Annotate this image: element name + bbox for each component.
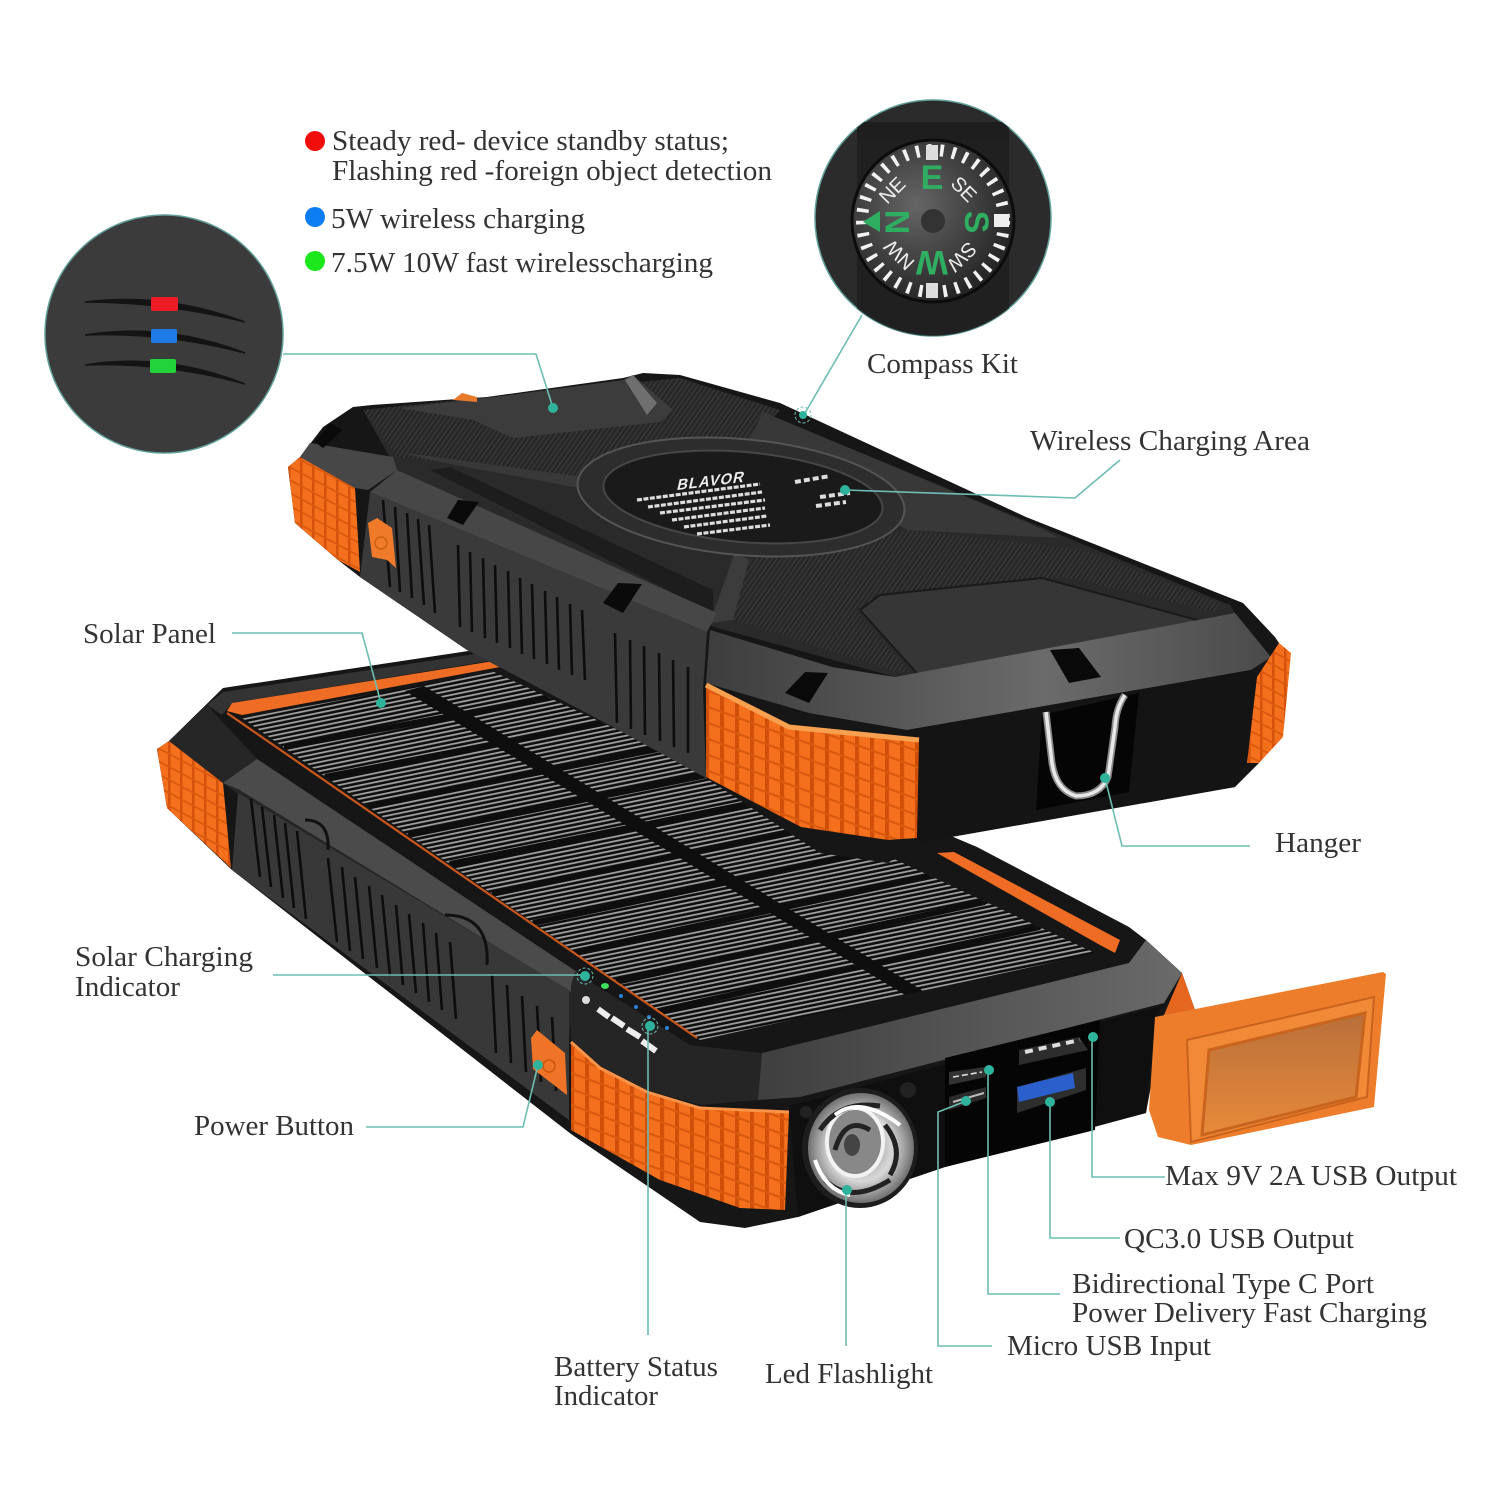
solar panel (242, 672, 1095, 1040)
gray tab (625, 375, 657, 415)
label: Solar Charging Indicator: Solar Charging (75, 942, 253, 973)
legend: blue: 5W wireless charging (331, 204, 585, 235)
LED close-up circle (45, 215, 283, 453)
indicator panel (571, 972, 762, 1105)
compass dial: SE (946, 173, 980, 207)
legend: green: 7.5W 10W fast wirelesscharging (331, 248, 713, 279)
label: Battery Status Indicator: Indicator (554, 1381, 659, 1412)
compass dial: NE (875, 173, 910, 208)
long side face with ribs (232, 793, 569, 1120)
device: upper power bank, back side (288, 373, 1291, 863)
label: Power Button: Power Button (194, 1111, 354, 1142)
flat recessed plate (860, 578, 1208, 680)
USB-C and micro USB ports (949, 1067, 986, 1110)
orange cap: rear (288, 457, 360, 572)
label: Micro USB Input: Micro USB Input (1007, 1331, 1211, 1362)
long side bevel (169, 705, 577, 1040)
gray plate (747, 412, 1060, 538)
port recess (945, 1020, 1100, 1167)
LED legend (305, 126, 772, 279)
orange nub (453, 393, 477, 402)
front face (907, 670, 1257, 843)
red LED (151, 297, 178, 311)
compass dial: NW (880, 235, 919, 274)
callout markers (376, 403, 1110, 1195)
leader lines (232, 315, 1250, 1346)
long side face with ribs (360, 492, 707, 778)
green LED (150, 359, 176, 373)
blue LED (151, 329, 177, 343)
compass dial: W (915, 243, 948, 281)
label: Bidirectional Type C Port: Power Delivery Fast Charging (1072, 1298, 1427, 1329)
diagonal channel (430, 467, 713, 613)
label: Solar Panel: Solar Panel (83, 619, 216, 650)
orange port cover (1149, 972, 1386, 1145)
pad fine print (637, 484, 770, 534)
label: Compass Kit: Compass Kit (867, 349, 1018, 380)
label: Max 9V 2A USB Output: Max 9V 2A USB Output (1165, 1161, 1457, 1192)
pad certification marks (795, 476, 850, 506)
power button (531, 1030, 567, 1095)
label: Bidirectional Type C Port (1072, 1269, 1427, 1329)
status LEDs (582, 983, 669, 1051)
front gray bevel (706, 613, 1271, 730)
compass dial (852, 140, 1014, 302)
rear end bevel (300, 443, 397, 490)
wireless charging pad (573, 425, 909, 569)
legend: red: Flashing red -foreign object detection (332, 156, 772, 187)
power button (368, 518, 396, 568)
front notches (785, 648, 1101, 703)
hanger slot (1036, 693, 1139, 810)
legend: red: Steady red- device standby status; (332, 126, 729, 157)
label: Solar Charging Indicator: Indicator (75, 972, 181, 1003)
device: lower solar power bank (157, 645, 1386, 1228)
front gray bevel (758, 940, 1182, 1100)
gray strap (710, 552, 749, 623)
orange trim strips (227, 661, 1120, 1038)
orange cap: rear left (157, 741, 231, 868)
lower device body (157, 645, 1195, 1228)
compass dial: N (879, 210, 917, 234)
label: Solar Charging Indicator (75, 942, 253, 1003)
orange cap: front (571, 1042, 789, 1210)
label: Bidirectional Type C Port: Bidirectional Type C Port (1072, 1269, 1374, 1300)
textured back region (363, 378, 780, 483)
orange side sliver (1164, 973, 1195, 1015)
label: Hanger: Hanger (1275, 828, 1362, 859)
side notches (447, 500, 642, 613)
long side bevel (370, 470, 717, 632)
orange cap: front (706, 685, 919, 840)
label: Wireless Charging Area: Wireless Charging Area (1030, 426, 1311, 457)
label: Led Flashlight: Led Flashlight (765, 1359, 933, 1390)
compass dial: SW (942, 237, 980, 275)
legend: red (305, 126, 772, 187)
textured right region (733, 530, 1220, 673)
frame ridge (207, 654, 495, 715)
metal hanger (1046, 695, 1125, 796)
rear end slot (315, 423, 343, 448)
flashlight (800, 1082, 918, 1208)
back face (363, 378, 1235, 677)
pad label: BLAVOR (675, 469, 747, 494)
label: Battery Status Indicator: Battery Status (554, 1352, 718, 1383)
label: Battery Status Indicator (554, 1352, 718, 1412)
compass dial: E (921, 159, 943, 197)
compass dial: S (957, 211, 995, 233)
label: QC3.0 USB Output: QC3.0 USB Output (1124, 1224, 1354, 1255)
orange cap: right (1247, 643, 1291, 763)
upper device body (288, 373, 1279, 863)
top plateau (400, 375, 673, 438)
band left of wireless pad (397, 452, 592, 490)
compass close-up circle (815, 100, 1051, 340)
front face (789, 1005, 1164, 1217)
USB output ports (1017, 1037, 1088, 1113)
